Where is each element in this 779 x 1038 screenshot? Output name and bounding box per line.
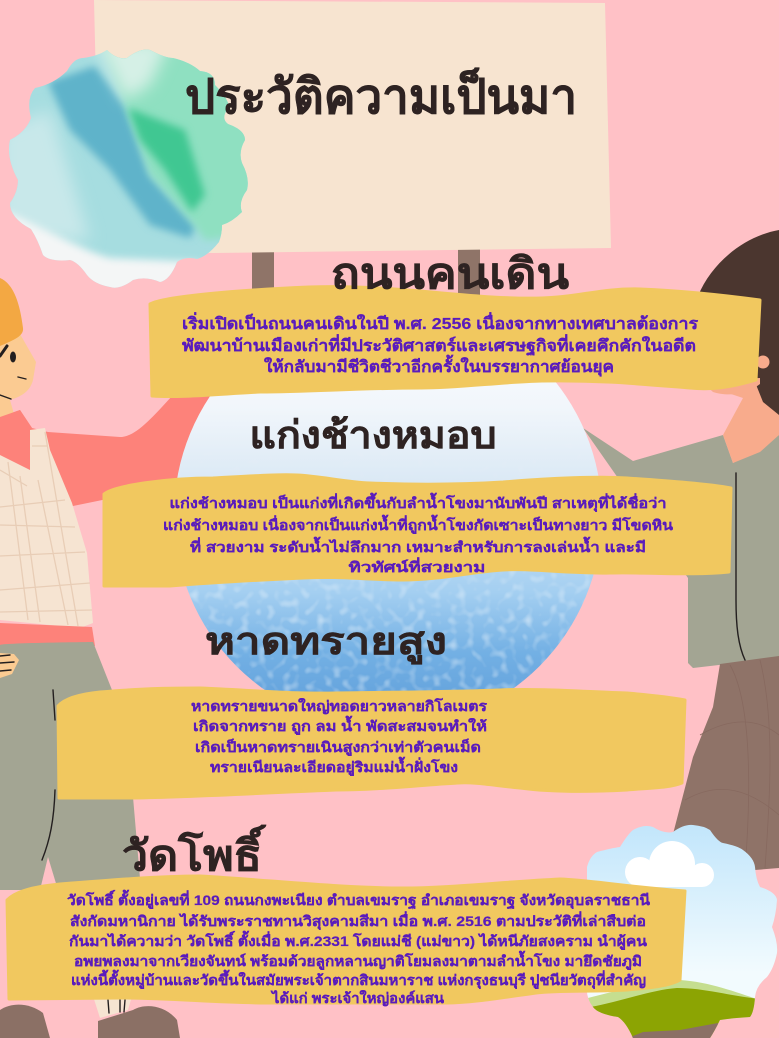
title: ประวัติความเป็นมา (185, 67, 577, 124)
text block: ที่ สวยงาม ระดับน้ำไม่ลึกมาก เหมาะสำหรับการลงเล่นน้ำ และมี (190, 536, 646, 555)
skirt pattern (685, 660, 779, 870)
text block: แก่งช้างหมอบ เนื่องจากเป็นแก่งน้ำที่ถูกน้ำโขงกัดเซาะเป็นทางยาว มีโขดหิน (163, 514, 673, 534)
text block: ทิวทัศน์ที่สวยงาม (348, 557, 486, 575)
collar tip (0, 410, 32, 470)
panel: หาดทรายสูง (58, 688, 685, 798)
light hill (580, 980, 760, 1038)
glitter circle (177, 382, 598, 692)
sign board (94, 0, 611, 305)
heading: หาดทรายสูง: หาดทรายสูง (205, 621, 447, 665)
right sock (93, 996, 132, 1018)
shirt seam (736, 473, 745, 660)
trouser seam (42, 690, 55, 860)
panel: ถนนคนเดิน (150, 287, 760, 397)
text block: พัฒนาบ้านเมืองเก่าที่มีประวัติศาสตร์และเศรษฐกิจที่เคยคึกคักในอดีต (182, 334, 696, 356)
text block: ได้แก่ พระเจ้าใหญ่องค์แสน (270, 989, 444, 1007)
hair (0, 278, 23, 346)
neck (713, 380, 779, 463)
panel: แก่งช้างหมอบ (104, 475, 731, 586)
text block: ให้กลับมามีชีวิตชีวาอีกครั้งในบรรยากาศย้อนยุค (264, 354, 614, 377)
text block (67, 889, 650, 1007)
leg gap (40, 857, 58, 890)
mouth (0, 377, 26, 399)
text block: กันมาได้ความว่า วัดโพธิ์ ตั้งเมื่อ พ.ศ.2331 โดยแม่ชี (แม่ขาว) ได้หนีภัยสงคราม นำผู้คน (69, 930, 647, 950)
eye (10, 352, 16, 362)
text block (163, 492, 673, 575)
face (700, 378, 760, 394)
text block: เริ่มเปิดเป็นถนนคนเดินในปี พ.ศ. 2556 เนื่องจากทางเทศบาลต้องการ (182, 312, 698, 333)
dark hill (590, 988, 760, 1038)
text block: ทรายเนียนละเอียดอยู่ริมแม่น้ำฝั่งโขง (210, 756, 458, 776)
heading: แก่งช้างหมอบ: แก่งช้างหมอบ (250, 415, 496, 457)
text block: เกิดจากทราย ถูก ลม น้ำ พัดสะสมจนทำให้ (193, 715, 487, 735)
sleeve and collar (0, 395, 230, 560)
left shoe and sock (0, 1005, 50, 1038)
text block (191, 697, 488, 776)
hair (698, 230, 779, 415)
finger lines (0, 655, 14, 671)
right person illustration (583, 230, 779, 870)
text block: สังกัดมหานิกาย ได้รับพระราชทานวิสุงคามสีมา เมื่อ พ.ศ. 2516 ตามประวัติที่เล่าสืบต่อ (70, 911, 646, 930)
trunk (628, 1023, 718, 1038)
eyebrow (0, 346, 7, 356)
face (0, 334, 36, 420)
hand (0, 653, 19, 678)
text block: แก่งช้างหมอบ เป็นแก่งที่เกิดขึ้นกับลำน้ำโขงมานับพันปี สาเหตุที่ได้ชื่อว่า (170, 492, 666, 512)
text block: หาดทรายขนาดใหญ่ทอดยาวหลายกิโลเมตร (191, 697, 488, 715)
sock lines (108, 1000, 125, 1013)
text block (182, 312, 698, 377)
shirt (583, 428, 779, 668)
heading: วัดโพธิ์: วัดโพธิ์ (122, 824, 267, 879)
left person illustration (0, 278, 230, 1038)
panel: วัดโพธิ์ (7, 876, 685, 1007)
text block: วัดโพธิ์ ตั้งอยู่เลขที่ 109 ถนนกงพะเนียง ตำบลเขมราฐ อำเภอเขมราฐ จังหวัดอุบลราชธานี (67, 889, 650, 910)
cloud (625, 841, 714, 887)
text block: อพยพลงมาจากเวียงจันทน์ พร้อมด้วยลูกหลานญาติโยมลงมาตามลำน้ำโขง มายึดชัยภูมิ (74, 950, 642, 970)
heading: ถนนคนเดิน: ถนนคนเดิน (331, 250, 569, 297)
right shoe (98, 1006, 180, 1038)
trousers (0, 642, 141, 890)
text block: แห่งนี้ตั้งหมู่บ้านและวัดขึ้นในสมัยพระเจ้าตากสินมหาราช แห่งกรุงธนบุรี ปูชนียวัตถุที่สำคัญ (71, 969, 646, 989)
waistband (0, 623, 95, 646)
text block: เกิดเป็นหาดทรายเนินสูงกว่าเท่าตัวคนเม็ด (195, 738, 481, 756)
ear (756, 356, 770, 368)
plaid vest (0, 428, 93, 628)
skirt (673, 656, 779, 870)
landscape badge (580, 820, 779, 1038)
watercolor blob (9, 50, 248, 288)
